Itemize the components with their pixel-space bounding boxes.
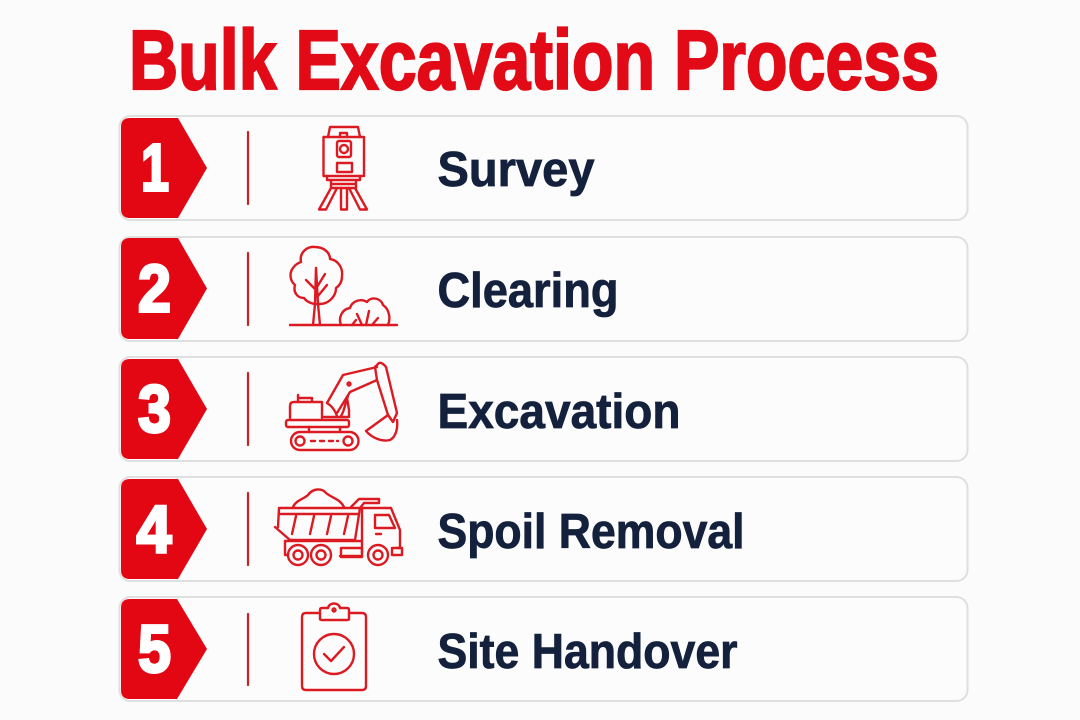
- badge: 2: 2: [138, 252, 171, 326]
- panel: step 4 spoil removal: [120, 477, 968, 581]
- label: Survey: Survey: [438, 143, 594, 197]
- badge: 1: [121, 118, 207, 218]
- panel: step 2 clearing: [120, 237, 968, 341]
- label: Site Handover: Site Handover: [438, 625, 738, 679]
- badge: 1: 1: [141, 130, 169, 206]
- icon: tree and bush: [290, 247, 397, 325]
- label: Excavation: Excavation: [438, 385, 680, 439]
- badge: 4: 4: [136, 492, 172, 568]
- badge: 5: [121, 599, 207, 699]
- badge: 5: 5: [138, 612, 171, 687]
- panel: step 3 excavation: [120, 357, 968, 461]
- badge: 3: 3: [138, 372, 171, 447]
- panel: step 5 site handover: [120, 597, 968, 701]
- icon: dump truck with soil: [275, 489, 402, 565]
- badge: 3: [121, 359, 207, 459]
- label: Clearing: Clearing: [438, 264, 618, 318]
- badge: 4: [121, 479, 207, 579]
- panel: step 1 survey: [120, 116, 968, 220]
- label: Spoil Removal: Spoil Removal: [438, 505, 744, 559]
- icon: total station on tripod: [319, 127, 367, 210]
- icon: clipboard with check: [302, 604, 366, 690]
- icon: excavator: [286, 363, 397, 450]
- badge: 2: [121, 238, 207, 339]
